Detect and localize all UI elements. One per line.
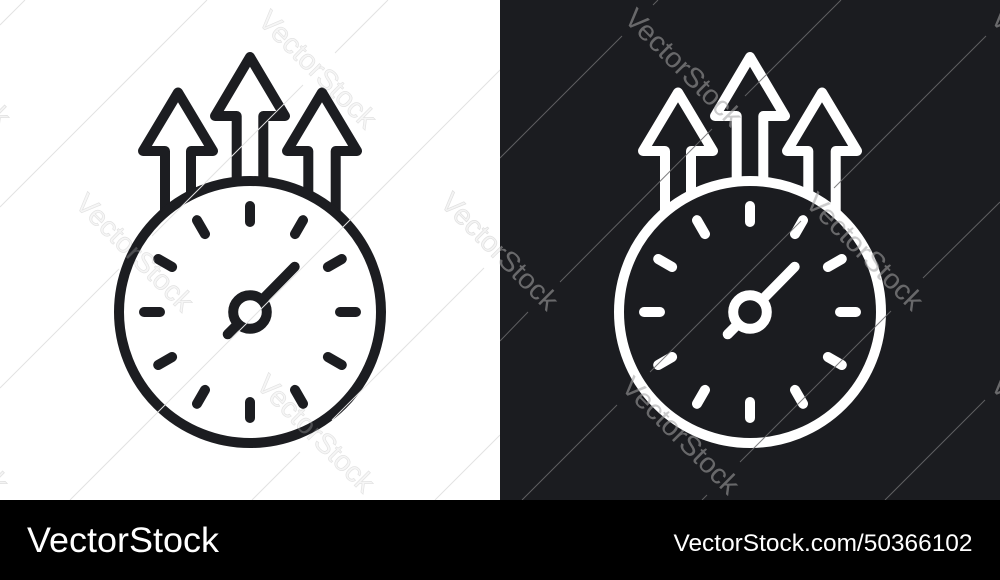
watermarks on white panel: VectorStock <box>253 4 383 135</box>
gauge needle <box>228 267 295 334</box>
footer bar <box>0 500 1000 580</box>
faint watermark trace over the dark icon: VectorStock <box>251 368 381 499</box>
panel: dark-theme background <box>500 0 1000 500</box>
gauge dial ring <box>119 181 381 443</box>
gauge tick marks <box>144 206 356 418</box>
watermarks on dark panel: VectorStock <box>800 186 930 317</box>
watermarks on white panel: VectorStock <box>435 186 565 317</box>
gauge needle <box>728 267 795 334</box>
watermarks on white panel <box>0 8 500 495</box>
watermarks on dark panel: VectorStock <box>619 2 749 133</box>
icon: left arrow <box>143 92 213 211</box>
footer brand name: VectorStock <box>27 521 220 560</box>
icon: center arrow <box>215 57 285 181</box>
panel: white light-theme background <box>0 0 500 500</box>
footer image URL: VectorStock.com/50366102 <box>674 530 972 557</box>
icon: white gauge with three arrows on dark panel <box>619 57 881 443</box>
icon: right arrow <box>287 92 357 211</box>
faint watermark trace over the dark icon: VectorStock <box>253 4 383 135</box>
gauge tick marks <box>644 206 856 418</box>
watermarks on dark panel: VectorStock <box>435 186 565 317</box>
faint watermark trace over the white icon: VectorStock <box>619 2 749 133</box>
watermarks on white panel: VectorStock <box>70 187 200 318</box>
faint watermark trace over the white icon: VectorStock <box>800 186 930 317</box>
gauge dial ring <box>619 181 881 443</box>
faint watermark trace over the dark icon: VectorStock <box>70 187 200 318</box>
faint watermark trace over the white icon: VectorStock <box>616 370 746 501</box>
icon: right arrow <box>787 92 857 211</box>
faint watermark trace over the dark icon <box>126 88 326 434</box>
watermarks on dark panel: VectorStock <box>616 370 746 501</box>
faint watermark trace over the white icon <box>632 100 922 436</box>
icon: dark gauge with three arrows on white panel <box>119 57 381 443</box>
icon: center arrow <box>715 57 785 181</box>
watermarks on dark panel <box>500 6 1000 496</box>
watermarks on white panel: VectorStock <box>251 368 381 499</box>
icon: left arrow <box>643 92 713 211</box>
